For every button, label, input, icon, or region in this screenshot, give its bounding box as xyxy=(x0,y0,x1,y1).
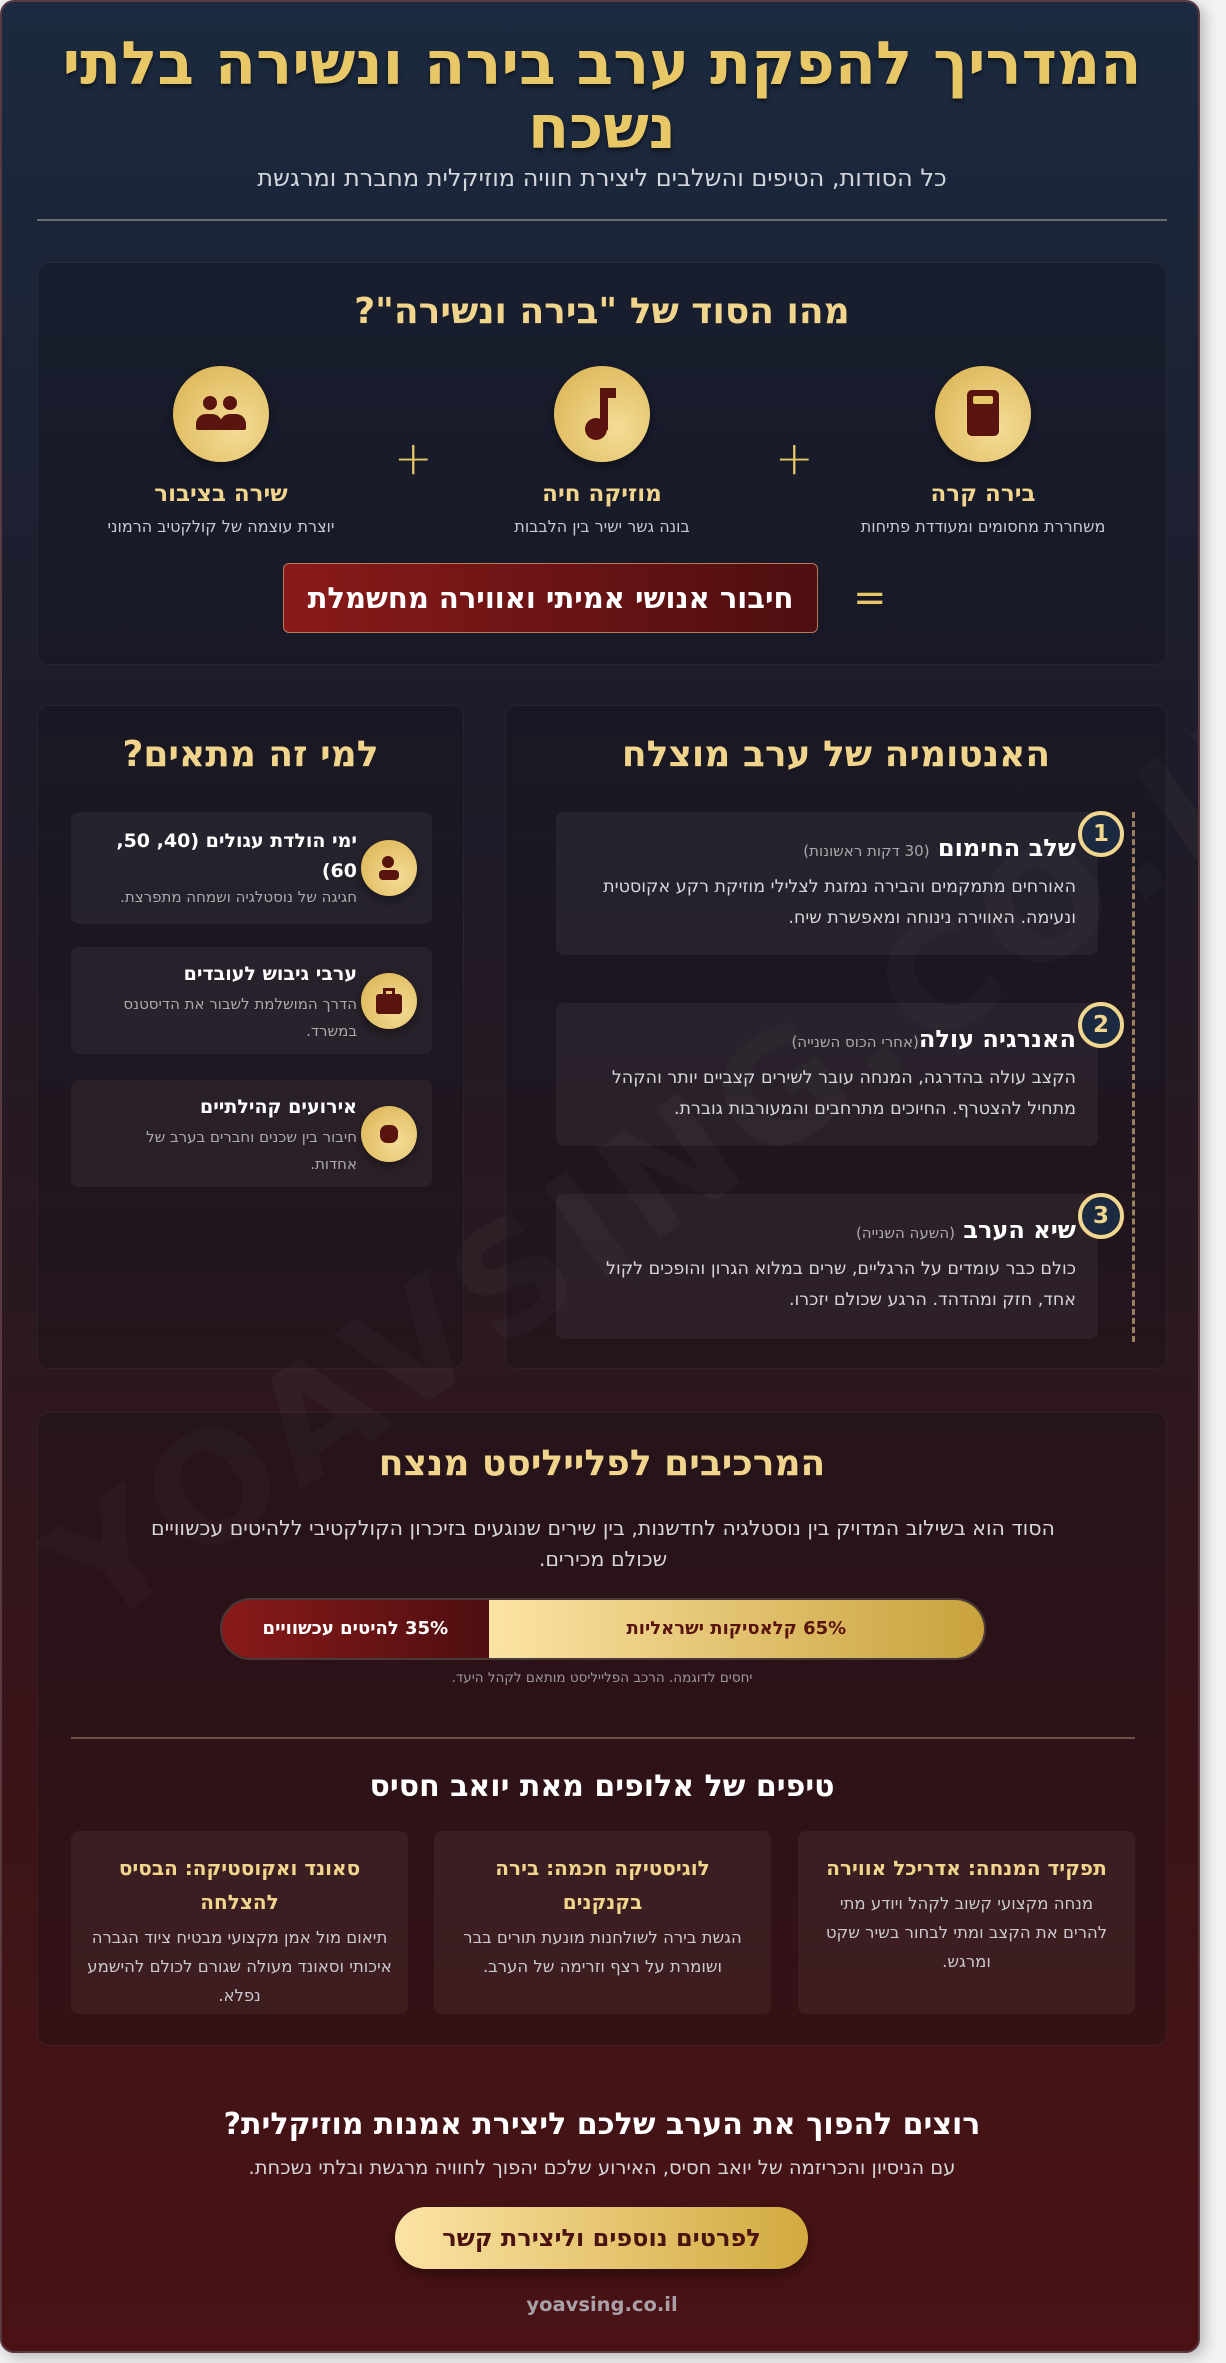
plus: + xyxy=(394,431,433,485)
step 1 xyxy=(556,812,1098,955)
step 3 xyxy=(556,1194,1098,1339)
tip 1: מנחה מקצועי קשוב לקהל ויודע מתי להרים את הקצב ומתי לבחור בשיר שקט ומרגש. xyxy=(826,1894,1107,1971)
CTA subtext: עם הניסיון והכריזמה של יואב חסיס, האירוע שלכם יהפוך לחוויה מרגשת ובלתי נשכחת. xyxy=(249,2156,955,2179)
CTA button: לפרטים נוספים וליצירת קשר xyxy=(442,2224,761,2252)
paragraph: הסוד הוא בשילוב המדויק בין נוסטלגיה לחדשנות, בין שירים שנוגעים בזיכרון הקולקטיבי ללהיטים עכשוויים שכולם מכירים. xyxy=(151,1516,1055,1571)
item: live music xyxy=(514,366,690,536)
step 3: כולם כבר עומדים על הרגליים, שרים במלוא הגרון והופכים לקול אחד, חזק ומהדהד. הרגע שכולם יזכרו. xyxy=(606,1259,1076,1310)
item: live music: מוזיקה חיה xyxy=(542,481,662,507)
result box xyxy=(283,563,818,633)
step 1: שלב החימום (30 דקות ראשונות) xyxy=(803,834,1076,862)
panel: secret formula xyxy=(37,262,1167,665)
heading: מהו הסוד של "בירה ונשירה"? xyxy=(354,291,850,332)
number 1: 1 xyxy=(1093,821,1109,847)
step 2: האנרגיה עולה(אחרי הכוס השנייה) xyxy=(791,1025,1076,1053)
subtitle: כל הסודות, הטיפים והשלבים ליצירת חוויה מוזיקלית מחברת ומרגשת xyxy=(257,164,947,192)
tip 2: לוגיסטיקה חכמה: בירה בקנקנים xyxy=(495,1856,710,1914)
number 1 xyxy=(1078,811,1124,857)
equals: = xyxy=(853,575,887,621)
icon: music note xyxy=(554,366,650,462)
heading: האנטומיה של ערב מוצלח xyxy=(622,734,1050,775)
item: birthdays: חגיגה של נוסטלגיה ושמחה מתפרצת. xyxy=(120,888,357,906)
tip 1: תפקיד המנחה: אדריכל אווירה xyxy=(826,1856,1107,1880)
item: group singing: שירה בציבור xyxy=(154,481,288,507)
icon: people xyxy=(173,366,269,462)
bar chart: 65% קלאסיקות ישראליות xyxy=(626,1618,846,1639)
step 3: שיא הערב (השעה השנייה) xyxy=(856,1216,1076,1244)
CTA button xyxy=(395,2207,808,2269)
number 2 xyxy=(1078,1002,1124,1048)
step 1: האורחים מתמקמים והבירה נמזגת לצלילי מוזיקת רקע אקוסטית ונעימה. האווירה נינוחה ומאפשרת שיח. xyxy=(603,877,1076,928)
item: group singing: יוצרת עוצמה של קולקטיב הרמוני xyxy=(108,517,334,536)
item: community events: אירועים קהילתיים xyxy=(200,1096,357,1118)
item: cold beer: בירה קרה xyxy=(930,481,1036,507)
bar chart xyxy=(220,1598,986,1660)
tip 2 xyxy=(434,1831,771,2014)
number 3: 3 xyxy=(1093,1203,1109,1229)
tip 2: הגשת בירה לשולחנות מונעת תורים בבר ושומרת על רצף וזרימה של הערב. xyxy=(463,1928,742,1976)
tips heading: טיפים של אלופים מאת יואב חסיס xyxy=(369,1769,835,1804)
heading: המרכיבים לפלייליסט מנצח xyxy=(379,1443,825,1484)
tip 1 xyxy=(798,1831,1135,2014)
CTA heading: רוצים להפוך את הערב שלכם ליצירת אמנות מוזיקלית? xyxy=(224,2107,980,2142)
item: live music: בונה גשר ישיר בין הלבבות xyxy=(514,517,690,536)
plus: + xyxy=(775,431,814,485)
item: cold beer: משחררת מחסומים ומעודדת פתיחות xyxy=(861,517,1105,536)
item: team building: ערבי גיבוש לעובדים xyxy=(184,963,357,985)
panel: playlist & tips xyxy=(37,1412,1167,2046)
number 2: 2 xyxy=(1093,1012,1109,1038)
note: יחסים לדוגמה. הרכב הפלייליסט מותאם לקהל היעד. xyxy=(452,1670,752,1686)
heading: למי זה מתאים? xyxy=(122,734,379,775)
result box: חיבור אנושי אמיתי ואווירה מחשמלת xyxy=(308,581,793,615)
tip 3: סאונד ואקוסטיקה: הבסיס להצלחה xyxy=(119,1856,360,1914)
item: community events xyxy=(71,1080,432,1187)
icon: beer xyxy=(935,366,1031,462)
item: cold beer xyxy=(860,366,1105,536)
panel: anatomy xyxy=(505,705,1167,1369)
item: birthdays: ימי הולדת עגולים (40, 50, 60) xyxy=(116,830,357,882)
panel: who is it for xyxy=(37,705,464,1369)
footer: yoavsing.co.il xyxy=(526,2293,678,2316)
bar chart: 35% להיטים עכשוויים xyxy=(263,1618,448,1639)
title: המדריך להפקת ערב בירה ונשירה בלתי נשכח xyxy=(62,29,1142,163)
item: team building xyxy=(71,947,432,1054)
tip 3 xyxy=(71,1831,408,2014)
step 2 xyxy=(556,1003,1098,1146)
step 2: הקצב עולה בהדרגה, המנחה עובר לשירים קצביים יותר והקהל מתחיל להצטרף. החיוכים מתרחבים והמעורבות גוברת. xyxy=(612,1068,1076,1119)
item: birthdays xyxy=(71,812,432,924)
item: team building: הדרך המושלמת לשבור את הדיסטנס במשרד. xyxy=(123,995,357,1040)
item: community events: חיבור בין שכנים וחברים בערב של אחדות. xyxy=(146,1128,357,1173)
number 3 xyxy=(1078,1193,1124,1239)
item: group singing xyxy=(108,366,334,536)
tip 3: תיאום מול אמן מקצועי מבטיח ציוד הגברה איכותי וסאונד מעולה שגורם לכולם להישמע נפלא. xyxy=(87,1928,392,2005)
